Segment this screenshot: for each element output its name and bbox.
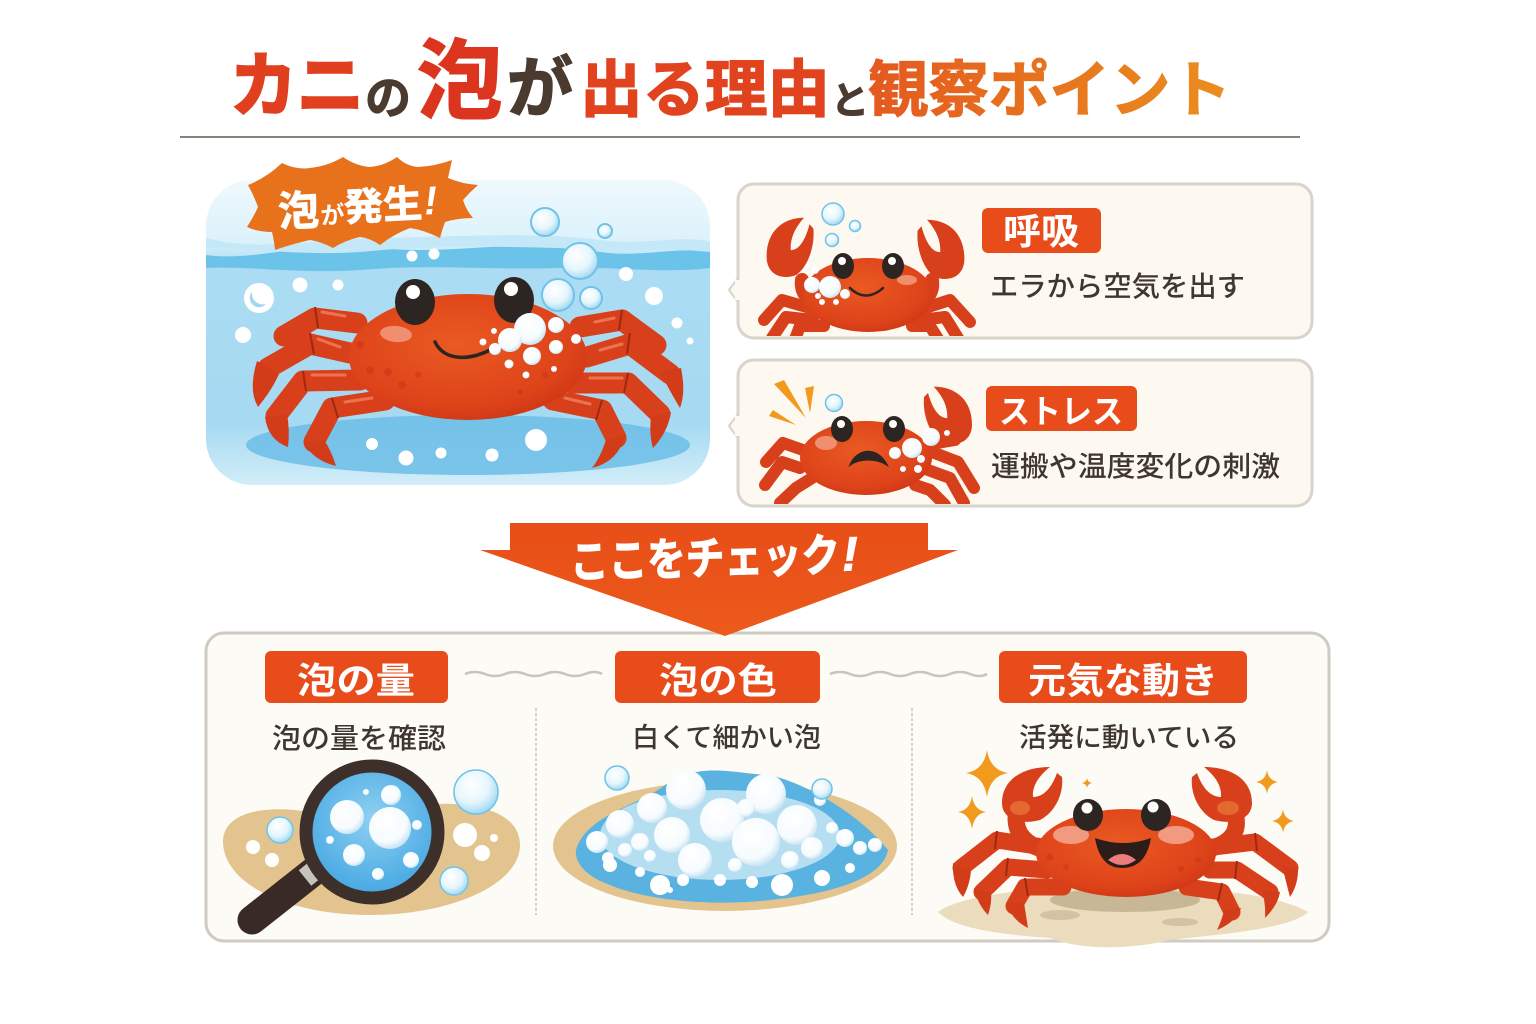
arrow: ここをチェック	[480, 523, 958, 636]
panel: ストレス	[729, 360, 1312, 506]
foam on crab	[480, 313, 581, 378]
title: の	[365, 72, 411, 124]
label: 泡の色	[615, 651, 820, 703]
label: 元気な動き	[999, 651, 1247, 703]
text: 活発に動いている	[1019, 723, 1239, 753]
main crab body	[349, 294, 587, 420]
label: 泡の量	[265, 651, 448, 703]
column: 泡の量	[223, 651, 520, 920]
leg joints and highlights	[303, 307, 630, 420]
panel: 呼吸	[729, 184, 1312, 342]
icon: breathing crab	[764, 203, 970, 342]
title: と	[831, 81, 869, 123]
arrow: ここをチェック: ここをチェック	[569, 530, 841, 588]
text: 呼吸 description: エラから空気を出す	[990, 271, 1245, 302]
starburst: 泡が発生	[247, 157, 478, 250]
panel: check points	[206, 633, 1329, 947]
starburst: 泡が発生: !	[423, 179, 438, 224]
starburst: 泡が発生: 発生	[343, 184, 423, 230]
label: 泡の量: 泡の量	[297, 660, 415, 701]
starburst: 泡が発生: が	[320, 201, 345, 230]
label: 元気な動き: 元気な動き	[1028, 660, 1218, 701]
main crab legs	[253, 307, 683, 468]
title: が	[507, 51, 573, 125]
water surface waves	[206, 246, 710, 271]
label: 呼吸	[982, 208, 1101, 253]
ambient bubbles	[235, 248, 694, 466]
water floor shadow	[246, 415, 690, 475]
title: 泡	[417, 34, 503, 130]
sparkles	[958, 750, 1294, 833]
title	[230, 34, 1231, 130]
label: 泡の色: 泡の色	[659, 660, 777, 701]
title: 出る理由	[580, 56, 830, 125]
text: 泡の量を確認	[272, 723, 446, 754]
arrow: ここをチェック: !	[841, 528, 859, 582]
starburst: 泡が発生: 泡	[277, 187, 320, 235]
icon: foam on sand	[553, 766, 897, 911]
crab smile	[435, 342, 490, 357]
column: 泡の色	[553, 651, 897, 911]
label: 呼吸: 呼吸	[1003, 211, 1079, 252]
icon: magnifier on sand	[223, 766, 520, 920]
text: ストレス description: 運搬や温度変化の刺激	[991, 451, 1280, 482]
icon: happy crab on sand	[938, 750, 1308, 947]
icon: stressed crab	[765, 380, 974, 505]
label: ストレス: ストレス	[999, 393, 1123, 430]
rising bubbles	[531, 208, 612, 311]
column: 元気な動き	[938, 651, 1308, 947]
panel: water scene with crab	[206, 180, 710, 485]
text: 白くて細かい泡	[632, 723, 821, 753]
title: 観察ポイント	[868, 56, 1231, 124]
crab eyes	[395, 277, 534, 325]
stress marks	[769, 380, 814, 425]
title: カニ	[230, 47, 364, 125]
